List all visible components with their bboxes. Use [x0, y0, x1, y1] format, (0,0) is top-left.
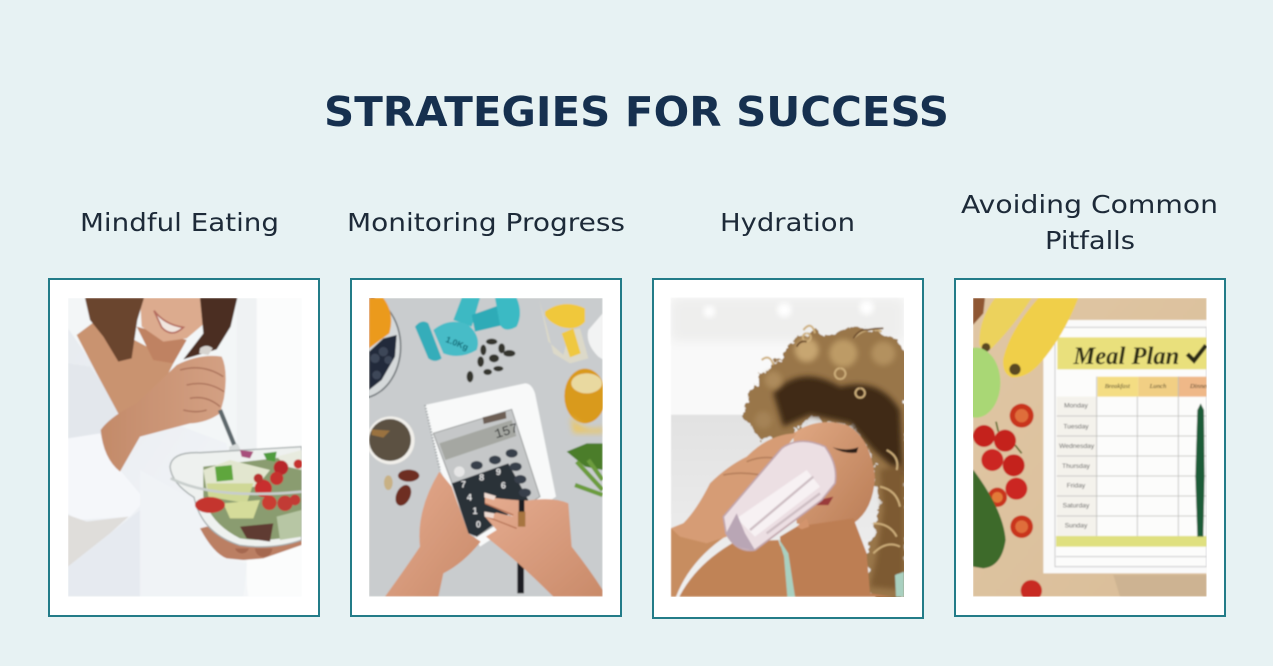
notebook	[425, 383, 556, 547]
panel: monitoring progress	[319, 279, 621, 616]
heading: Avoiding Common Pitfalls: Avoiding Common	[961, 190, 1218, 219]
heading: Monitoring Progress: Monitoring Progress	[347, 208, 625, 237]
photo: woman drinking water	[671, 298, 907, 600]
icon: calculator: 4	[467, 493, 472, 503]
icon: calculator: 9	[496, 467, 501, 477]
icon: green apple	[973, 347, 1001, 418]
shoulder	[679, 540, 797, 597]
icon: calculator	[433, 409, 540, 537]
icon: calculator: 7	[461, 479, 466, 489]
meal plan sheet: Thursday	[1062, 463, 1091, 470]
icon: teal dumbbells	[415, 298, 520, 361]
icon: avocado	[973, 469, 1006, 568]
icon: oil jar	[564, 369, 606, 433]
hands	[385, 472, 603, 597]
icon: pen	[516, 562, 525, 594]
icon: calculator: 0	[476, 519, 481, 529]
icon: measuring tape	[543, 303, 588, 364]
meal plan sheet	[1043, 320, 1209, 573]
photo: calculator and healthy items	[369, 298, 603, 597]
icon: calculator: 6	[501, 480, 506, 490]
icon: calculator: 157	[493, 422, 520, 443]
panel: hydration	[653, 279, 923, 618]
panel: mindful eating	[49, 279, 319, 616]
meal plan sheet: Tuesday	[1063, 424, 1089, 431]
text: meal plan: Meal Plan	[1072, 342, 1179, 370]
face and neck	[793, 422, 875, 531]
meal plan sheet: Wednesday	[1059, 443, 1095, 450]
icon: calculator: 1	[472, 506, 477, 516]
meal plan sheet: Saturday	[1063, 502, 1090, 509]
meal plan sheet: Dinner	[1189, 383, 1209, 390]
meal plan sheet: Friday	[1067, 482, 1086, 489]
icon: cherry tomatoes	[973, 404, 1042, 601]
icon: green pen	[1195, 403, 1205, 537]
photo: meal plan and fresh produce	[973, 298, 1207, 597]
photo: woman eating salad	[68, 298, 303, 597]
heading: Mindful Eating: Mindful Eating	[80, 208, 279, 237]
meal plan sheet: Breakfast	[1105, 383, 1130, 390]
hair	[743, 326, 907, 600]
heading: Hydration: Hydration	[720, 208, 855, 237]
icon: calculator: 8	[479, 473, 484, 483]
icon: bananas	[979, 298, 1078, 377]
meal plan sheet: Monday	[1064, 402, 1089, 409]
title: STRATEGIES FOR SUCCESS	[324, 88, 949, 136]
heading: Avoiding Common Pitfalls	[961, 190, 1218, 255]
icon: chia seed bowl	[367, 416, 415, 464]
icon: broccoli	[567, 443, 603, 495]
icon: glass of water	[723, 441, 836, 550]
icon: teal dumbbells: 1.0Kg	[444, 334, 470, 352]
meal plan sheet: Lunch	[1149, 383, 1167, 390]
hand and arm	[671, 433, 797, 543]
heading: Avoiding Common Pitfalls: Pitfalls	[1045, 226, 1135, 255]
panel: avoiding common pitfalls	[952, 279, 1225, 616]
meal plan sheet: Sunday	[1065, 522, 1088, 529]
